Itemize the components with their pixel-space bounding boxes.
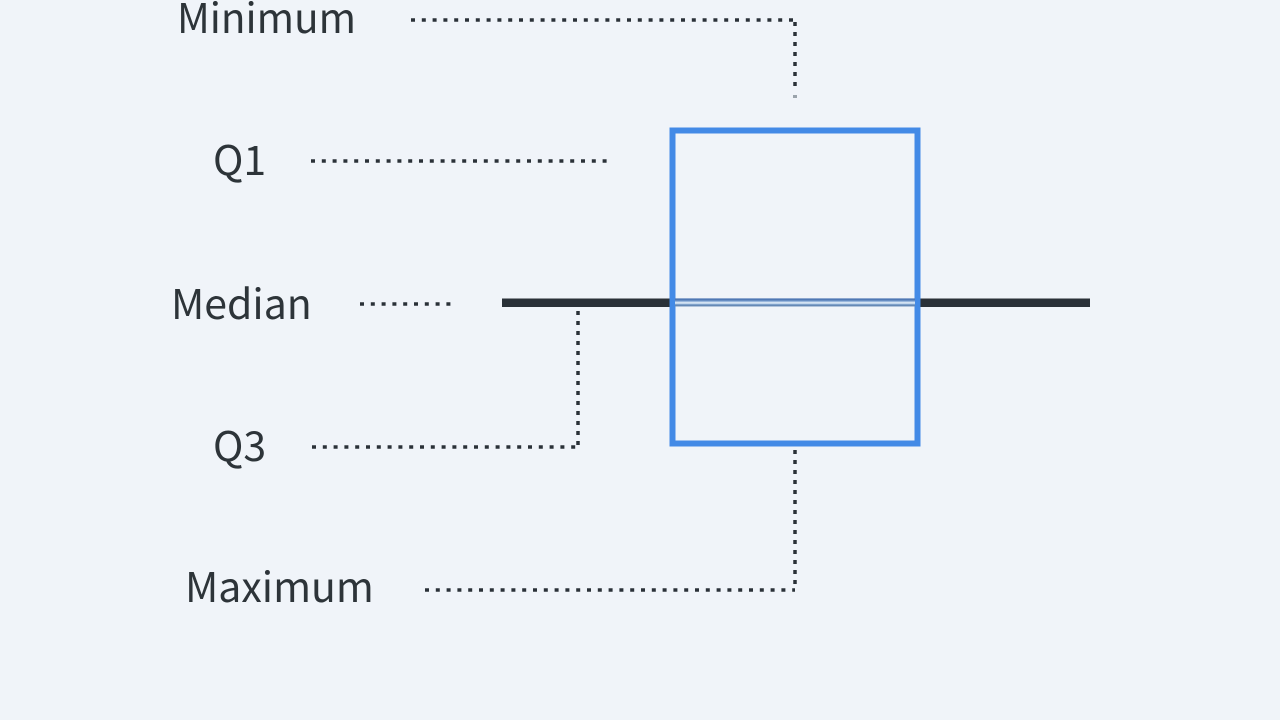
median line bbox=[502, 298, 1090, 307]
leader line: Maximum bbox=[425, 450, 795, 590]
leader line: Q1 bbox=[311, 159, 611, 163]
leader line: Minimum bbox=[411, 20, 797, 98]
leader line: Median bbox=[360, 302, 452, 306]
box: interquartile range bbox=[672, 130, 918, 444]
label: Q3: Q3 bbox=[213, 413, 266, 473]
label: Maximum: Maximum bbox=[185, 554, 374, 614]
label: Q1: Q1 bbox=[213, 127, 266, 187]
leader line: Q3 bbox=[312, 311, 578, 447]
label: Median: Median bbox=[171, 271, 312, 331]
